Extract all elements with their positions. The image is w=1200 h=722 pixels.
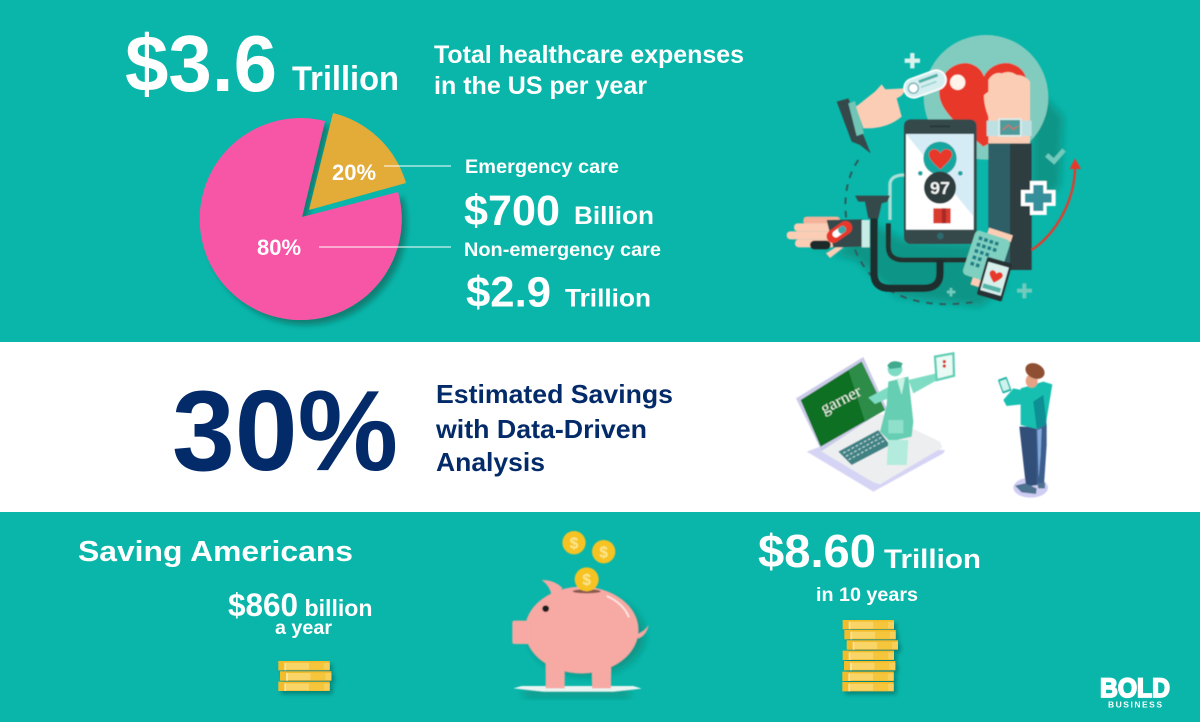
red heart — [939, 63, 1027, 147]
keyboard — [838, 430, 890, 465]
torso shade — [1033, 395, 1047, 428]
illustration: man looking at phone — [998, 360, 1052, 498]
logo: Bold Business: BOLD — [1100, 673, 1170, 703]
text: $8.60 trillion in 10 years: Trillion — [884, 544, 981, 574]
text: total healthcare expenses: in the US per year — [434, 72, 647, 100]
head — [1023, 360, 1047, 388]
text block: non-emergency care: Trillion — [565, 284, 651, 312]
plus: bottom right — [1017, 283, 1032, 298]
ear — [542, 580, 563, 597]
fist — [984, 72, 1030, 143]
leader line: emergency care — [384, 165, 451, 167]
text block: emergency care: $700 — [464, 187, 560, 235]
text block: emergency care — [464, 157, 654, 235]
arm — [1003, 388, 1031, 406]
red arrow — [1032, 158, 1081, 250]
text: $860 billion a year: a year — [275, 618, 333, 639]
leader line: non-emergency care — [319, 246, 451, 248]
text: $8.60 trillion in 10 years: in 10 years — [816, 585, 918, 606]
slot — [573, 589, 601, 593]
legs — [546, 663, 611, 688]
logo: Bold Business: BUSINESS — [1108, 700, 1162, 710]
text: $860 billion a year: $860 — [228, 587, 298, 623]
smartphone — [904, 119, 977, 244]
text block: emergency care: Emergency care — [465, 157, 619, 178]
text block: non-emergency care: $2.9 — [466, 268, 551, 316]
phone — [998, 377, 1012, 394]
falling coin 3 — [575, 567, 599, 591]
icon: tall coin stack — [842, 620, 898, 691]
text block: non-emergency care: Non-emergency care — [464, 240, 661, 261]
plus: top — [905, 53, 920, 68]
falling coin 2 — [592, 540, 615, 563]
bottom teal background panel — [0, 512, 1200, 722]
base ellipse — [1013, 478, 1048, 498]
label: 80%: 80% — [257, 235, 301, 260]
pie slice: non-emergency 80% — [200, 118, 402, 320]
legs — [1019, 424, 1047, 487]
screen highlight — [848, 362, 885, 422]
pie chart: 80 / 20 split — [200, 113, 406, 320]
headline: $3.6 Trillion: $3.6 — [125, 19, 277, 108]
garner wordmark: garner — [817, 381, 865, 418]
text: $860 billion a year: billion — [304, 595, 372, 621]
illustration: laptop with virtual doctor — [796, 353, 954, 492]
text: estimated savings: Analysis — [436, 447, 545, 477]
check mark — [1047, 150, 1064, 161]
icon: small coin stack — [278, 661, 331, 691]
text: total healthcare expenses — [434, 41, 744, 100]
wearable devices — [960, 224, 1013, 302]
smartphone: 97 — [930, 178, 950, 198]
smart watch — [987, 118, 1032, 137]
falling coin 1 — [562, 531, 586, 554]
pill sensor — [901, 68, 949, 100]
long shadows — [800, 83, 1063, 307]
lower hand with band — [787, 217, 870, 258]
pig body shadow — [528, 593, 645, 677]
laptop screen frame — [796, 357, 887, 451]
ground line — [513, 686, 642, 692]
laptop shadow — [807, 447, 945, 492]
headline: 30%: 30% — [172, 368, 398, 495]
label: 20%: 20% — [332, 160, 376, 185]
falling coin 1: $ — [570, 535, 579, 552]
illustration: piggy bank with coins — [512, 531, 649, 697]
text: $8.60 trillion in 10 years — [758, 525, 981, 606]
ground shadow — [523, 690, 630, 697]
body — [525, 587, 638, 673]
text block: non-emergency care — [464, 240, 661, 316]
text block: emergency care: Billion — [574, 202, 654, 230]
medical cross inner — [1025, 185, 1052, 211]
pie slice: emergency 20% — [309, 113, 406, 210]
doctor tablet — [935, 353, 954, 380]
top teal background panel — [0, 0, 1200, 342]
stethoscope — [855, 175, 967, 288]
text: estimated savings: Estimated Savings — [436, 379, 673, 409]
heading: saving Americans: Saving Americans — [78, 536, 353, 568]
eye — [542, 605, 549, 612]
pale circle backdrop — [924, 35, 1048, 160]
shoes — [1015, 482, 1045, 494]
pointing hand — [837, 84, 904, 153]
text: $860 billion a year — [228, 587, 372, 639]
middle white band panel — [0, 342, 1200, 512]
falling coin 3: $ — [582, 572, 591, 589]
forearm sleeve — [988, 143, 1032, 270]
text: total healthcare expenses: Total healthcare expenses — [434, 41, 744, 69]
text: $8.60 trillion in 10 years: $8.60 — [758, 525, 876, 577]
white dot on heart — [950, 75, 965, 90]
medical cross — [1021, 181, 1056, 215]
laptop screen — [801, 362, 885, 447]
headline: $3.6 Trillion — [125, 19, 399, 108]
illustration: digital health devices — [787, 35, 1081, 307]
dashed arc — [845, 160, 977, 304]
laptop base — [821, 413, 942, 484]
plus: bottom small — [947, 288, 955, 296]
headline: $3.6 Trillion: Trillion — [292, 60, 399, 98]
text: estimated savings — [435, 379, 673, 477]
highlight — [607, 596, 629, 617]
text: estimated savings: with Data-Driven — [435, 414, 647, 444]
snout — [512, 621, 531, 644]
virtual doctor — [868, 361, 937, 465]
falling coin 2: $ — [599, 544, 608, 561]
torso — [1021, 382, 1052, 429]
tail — [633, 625, 649, 638]
